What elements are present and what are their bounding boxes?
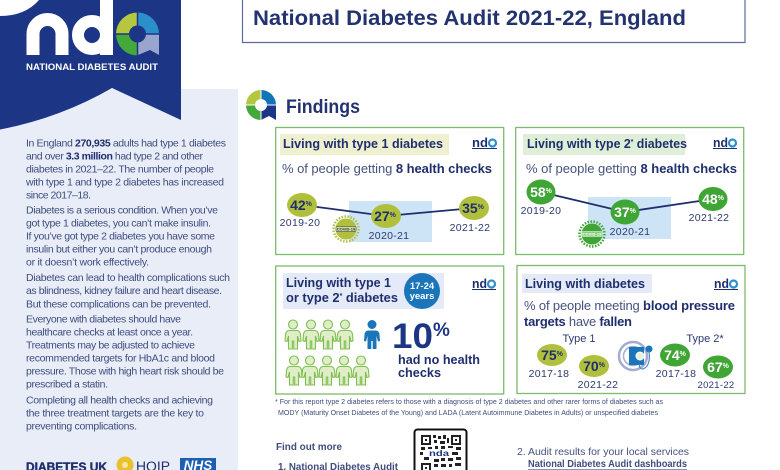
panel heading: Living with diabetes: [525, 276, 645, 291]
text block: health checks: healthcare checks at least once a year.: [26, 326, 193, 338]
data point 2019-20: 2019-20: [280, 217, 320, 229]
text block: audit results link: National Diabetes Audit dashboards: [528, 458, 687, 470]
stat caption: had no health: [398, 353, 480, 367]
text block: conclusion: Completing all health checks and achieving: [26, 394, 213, 406]
text block: complications: Diabetes can lead to health complications such: [26, 272, 230, 284]
text block: health checks: prescribed a statin.: [26, 378, 108, 390]
logo letter d: [78, 0, 113, 55]
panel heading: Living with type 1 diabetes: [283, 136, 443, 151]
data point 2020-21: %: [630, 208, 637, 215]
subheading: targets have fallen: [524, 314, 632, 329]
text block: conclusion: the three treatment targets are the key to: [26, 408, 204, 420]
data point type 2 2017-18: 74: [664, 347, 680, 363]
data point 2020-21: 27: [374, 208, 390, 224]
footnote: [275, 397, 663, 417]
stat caption: [398, 353, 480, 380]
icon: small nda logo: nd: [713, 135, 728, 150]
text block: health checks: pressure. Those with high heart risk should be: [26, 366, 224, 378]
data point 2021-22: 2021-22: [689, 212, 729, 224]
data point 2019-20: [280, 193, 320, 229]
panel: blood pressure targets: [517, 266, 745, 394]
subheading: % of people getting 8 health checks: [282, 161, 492, 176]
panel heading: Living with type 1: [286, 275, 391, 290]
icon: covid virus: [334, 216, 358, 242]
pictogram: one highlighted person: [364, 320, 380, 349]
covid year highlight: [588, 197, 671, 239]
data point 2020-21: 2020-21: [369, 230, 409, 242]
title box: [242, 0, 745, 42]
text block: what diabetes is: got type 1 diabetes, you can’t make insulin.: [26, 218, 211, 230]
data point 2021-22: %: [478, 204, 485, 211]
panel heading: [283, 273, 444, 309]
data point type 1 2017-18: %: [557, 351, 564, 358]
text block: sidebar intro: and over 3.3 million had type 2 and other: [26, 150, 204, 162]
panel heading: *: [631, 139, 634, 146]
text block: sidebar intro: since 2017–18.: [26, 190, 91, 202]
logo roundel: [116, 12, 159, 56]
data point 2019-20: %: [306, 201, 313, 208]
text block: sidebar intro: with type 1 and type 2 diabetes has increased: [25, 176, 224, 188]
icon: small nda logo: [472, 276, 496, 291]
badge: age range: years: [410, 291, 434, 302]
icon: covid virus: COVID-19: [337, 226, 356, 232]
text block: sidebar intro: [25, 138, 226, 202]
text block: complications: [26, 272, 230, 310]
icon: small nda logo: nd: [472, 276, 487, 291]
icon: small nda logo: nd: [472, 135, 488, 150]
data point type 1 2021-22: 2021-22: [578, 379, 618, 391]
data point 2020-21: [610, 200, 650, 238]
data point type 1 2017-18: 2017-18: [529, 368, 569, 380]
data point 2021-22: %: [718, 195, 725, 202]
panel: young adults no checks: [276, 266, 504, 394]
heading: Findings: Findings: [286, 97, 360, 118]
data point type 2 2017-18: [656, 344, 696, 380]
text block: what diabetes is: If you’ve got type 2 diabetes you have some: [26, 230, 215, 242]
data point type 1 2021-22: 70: [583, 358, 599, 374]
data point type 2 2021-22: %: [723, 363, 730, 370]
label: Type 2: Type 2*: [686, 333, 724, 345]
text block: complications: as blindness, kidney failure and heart disease.: [26, 285, 222, 297]
logo caption: NATIONAL DIABETES AUDIT: [26, 62, 158, 73]
panel heading: [523, 134, 687, 155]
data point type 2 2017-18: %: [680, 351, 687, 358]
covid year highlight: [349, 201, 432, 242]
heading: Findings: [246, 90, 360, 120]
text block: health checks: [26, 314, 224, 390]
text block: audit results link: 2. Audit results for your local services: [517, 446, 689, 458]
icon: small nda logo: [713, 135, 737, 150]
icon: small nda logo: nd: [714, 276, 729, 291]
badge: age range: [404, 273, 440, 309]
text block: complications: But these complications can be prevented.: [26, 298, 211, 310]
text block: sidebar intro: In England 270,935 adults had type 1 diabetes: [26, 138, 226, 150]
data point 2019-20: %: [546, 188, 553, 195]
data point 2021-22: 48: [702, 191, 718, 207]
icon: findings roundel: [246, 90, 276, 120]
data point type 2 2021-22: 67: [707, 359, 723, 375]
QR code: [414, 430, 466, 470]
text block: what diabetes is: Diabetes is a serious condition. When you’ve: [26, 204, 218, 216]
data point type 1 2021-22: [578, 355, 618, 391]
data point type 2 2017-18: 2017-18: [656, 368, 696, 380]
data point 2021-22: [689, 187, 729, 224]
logo letter n: [33, 20, 62, 55]
text block: what diabetes is: insulin but either you can’t produce enough: [26, 244, 212, 256]
footnote: MODY (Maturity Onset Diabetes of the Young) and LADA (Latent Autoimmune Diabetes in Adults) or unspecified diabetes: [278, 408, 658, 417]
data point 2020-21: 37: [614, 204, 630, 220]
data point type 2 2021-22: 2021-22: [698, 380, 734, 391]
QR code: nda: [429, 449, 450, 458]
panel heading: [280, 134, 449, 155]
subheading: % of people meeting blood pressure: [524, 298, 735, 313]
data point 2021-22: 35: [462, 200, 478, 216]
text block: conclusion: [26, 394, 213, 432]
icon: covid virus: [580, 222, 604, 246]
data point type 1 2017-18: [529, 344, 569, 380]
panel: type 1 health checks: [276, 128, 504, 254]
text block: what diabetes is: [26, 204, 218, 268]
data point 2019-20: 2019-20: [521, 205, 561, 217]
text block: health checks: recommended targets for HbA1c and blood: [26, 352, 215, 364]
subheading: % of people getting 8 health checks: [526, 161, 737, 176]
panel heading: diabetes: [633, 136, 687, 151]
data point 2020-21: %: [390, 212, 397, 219]
icon: small nda logo: [714, 276, 738, 291]
heading: find out more: Find out more: [276, 441, 342, 453]
banner: NDA logo ribbon: [0, 0, 181, 130]
panel heading: *: [340, 293, 343, 300]
badge: age range: 17-24: [410, 281, 435, 292]
data point 2021-22: [450, 196, 490, 234]
text block: sidebar intro: diabetes in 2021–22. The number of people: [26, 164, 214, 176]
label: Type 1: Type 1: [562, 333, 596, 345]
data point type 1 2021-22: %: [599, 362, 606, 369]
pictogram: nine of ten people: [285, 320, 369, 385]
stat caption: checks: [398, 366, 441, 380]
text block: what diabetes is: or it doesn’t work effectively.: [26, 256, 149, 268]
title box: National Diabetes Audit 2021-22, England: [253, 7, 686, 30]
data point 2019-20: 58: [530, 184, 546, 200]
line chart: [302, 205, 474, 216]
panel: sidebar background: [0, 89, 238, 470]
icon: blood pressure cuff: [619, 342, 652, 370]
icon: covid virus: COVID-19: [583, 232, 602, 236]
partner logo: HQIP: [116, 456, 170, 470]
text block: conclusion: preventing complications.: [26, 420, 137, 432]
stat: 10%: 10: [392, 317, 433, 356]
text block: health checks: Treatments may be adjusted to achieve: [26, 340, 195, 352]
data point type 2 2021-22: [698, 356, 734, 391]
line chart: [541, 192, 713, 212]
panel heading: diabetes: [342, 290, 398, 305]
footnote: * For this report type 2 diabetes refers to those with a diagnosis of type 2 diabetes and other rarer forms of diabetes such as: [275, 397, 663, 406]
text block: audit results link: [517, 446, 689, 470]
panel heading: or type 2: [286, 290, 340, 305]
stat: 10%: [392, 317, 450, 356]
data point 2020-21: 2020-21: [610, 226, 650, 238]
data point 2019-20: 42: [290, 197, 306, 213]
subheading: [524, 298, 735, 329]
data point 2019-20: [521, 180, 561, 217]
stat: 10%: %: [433, 320, 450, 341]
data point 2021-22: 2021-22: [450, 222, 490, 234]
icon: small nda logo: [472, 135, 497, 150]
panel: type 2 health checks: [516, 128, 744, 254]
panel heading: Living with type 2: [527, 136, 636, 151]
text block: health checks: Everyone with diabetes should have: [26, 314, 181, 326]
data point type 1 2017-18: 75: [541, 347, 557, 363]
data point 2020-21: [369, 204, 409, 242]
